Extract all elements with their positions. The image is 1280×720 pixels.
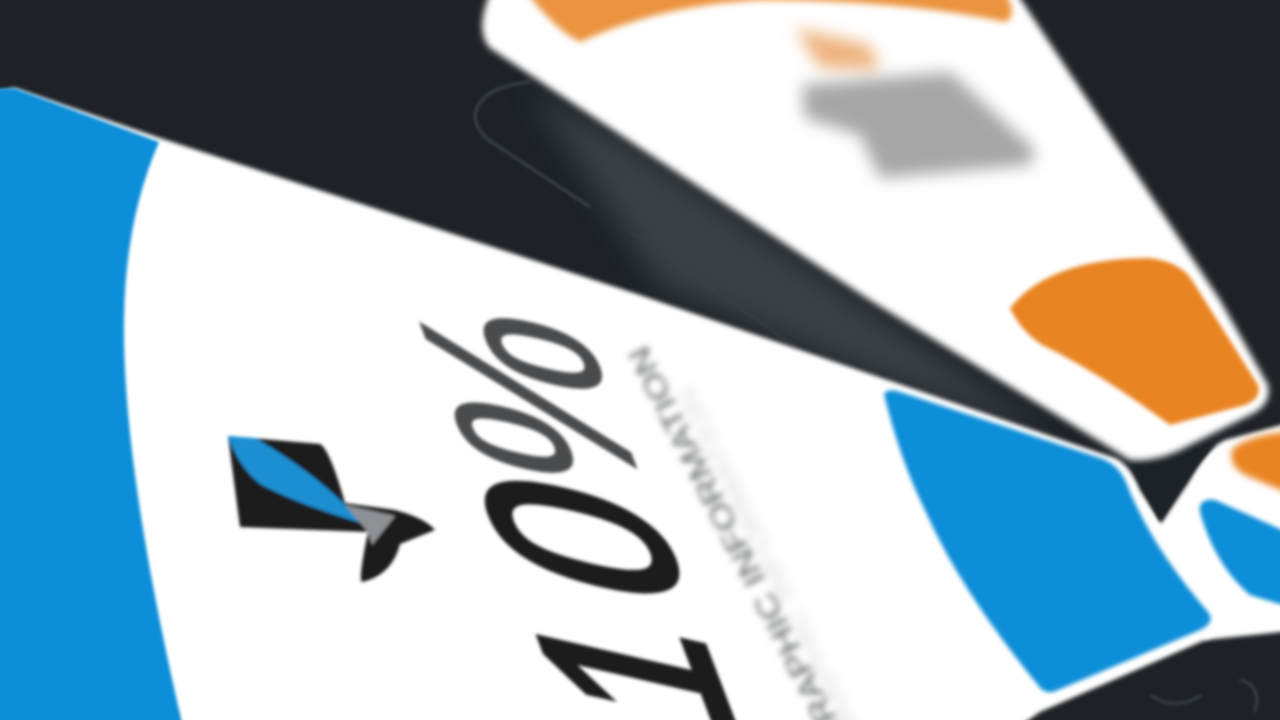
- left blue band: [0, 88, 186, 720]
- panel: upper white card: [482, 0, 1269, 460]
- fish tail highlight: [345, 505, 395, 545]
- sheen on dark wedge: [530, 90, 1060, 440]
- upper card orange top bar: [525, 0, 1012, 42]
- upper card blurred label: [795, 28, 880, 70]
- icon: fish: [228, 436, 435, 582]
- decorative outline arrow: [475, 82, 800, 350]
- right white card: [1130, 420, 1280, 640]
- blue segment: [884, 390, 1211, 692]
- right card orange segment: [1231, 430, 1280, 498]
- dark notch arrow: [1132, 444, 1215, 522]
- corner decorative strokes: [1150, 680, 1257, 712]
- upper card orange segment: [1010, 258, 1259, 425]
- upper card blurred text: [802, 72, 1035, 178]
- fish blue body: [228, 436, 362, 523]
- right card blue segment: [1200, 500, 1280, 610]
